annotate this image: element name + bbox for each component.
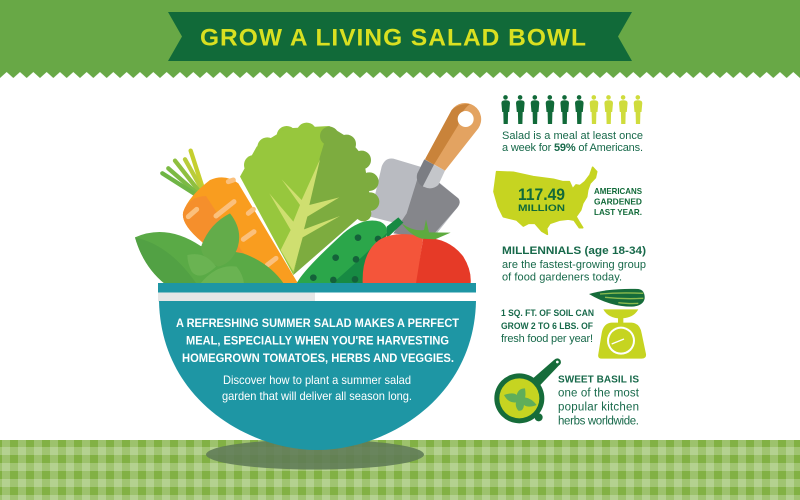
- stat text: americans gardened: GARDENED: [594, 196, 642, 206]
- stat text: millennials: are the fastest-growing group: [502, 259, 646, 271]
- stat text: salad: [502, 130, 643, 154]
- lettuce rib: [269, 159, 340, 272]
- bowl inner strip: [158, 292, 315, 302]
- bowl body text: garden that will deliver all season long.: [222, 389, 412, 403]
- stat text: americans gardened: AMERICANS: [594, 186, 642, 196]
- bowl body text: [222, 373, 412, 403]
- stat text: basil: [558, 374, 640, 428]
- stat text: basil: herbs worldwide.: [558, 416, 639, 428]
- bowl heading: A REFRESHING SUMMER SALAD MAKES A PERFECT: [176, 316, 460, 330]
- stat text: americans gardened: LAST YEAR.: [594, 207, 642, 217]
- icon: basil: [135, 213, 284, 284]
- title: GROW A LIVING SALAD BOWL: [200, 24, 586, 52]
- bowl heading: HOMEGROWN TOMATOES, HERBS AND VEGGIES.: [182, 351, 454, 365]
- stat text: soil: [501, 308, 594, 345]
- scale: [598, 309, 646, 359]
- icon: USA map: [494, 167, 597, 234]
- stat text: basil: one of the most: [558, 388, 640, 400]
- basil leaf: [504, 388, 537, 411]
- stat text: soil: GROW 2 TO 6 LBS. OF: [501, 321, 593, 332]
- bowl shadow: [206, 440, 424, 470]
- stat: 117.49 million: [518, 186, 565, 214]
- tablecloth: [0, 440, 800, 500]
- stat: 117.49 million: 117.49: [518, 186, 565, 204]
- stat text: basil: SWEET BASIL IS: [558, 374, 639, 386]
- icon: zucchini on scale: [589, 289, 646, 359]
- bowl body: [159, 301, 476, 450]
- stat: 117.49 million: MILLION: [518, 203, 565, 214]
- stat text: basil: popular kitchen: [558, 402, 639, 414]
- icon: trowel: [370, 103, 481, 238]
- zucchini: [589, 289, 645, 307]
- stat text: soil: fresh food per year!: [501, 333, 593, 345]
- icon: lettuce: [240, 123, 379, 275]
- stat: people pictogram: [501, 95, 642, 124]
- bowl body text: Discover how to plant a summer salad: [223, 373, 411, 387]
- stat text: millennials: MILLENNIALS (age 18-34): [502, 245, 646, 257]
- header band: [0, 0, 800, 78]
- icon: cucumber: [297, 217, 403, 284]
- stat text: salad: Salad is a meal at least once: [502, 130, 643, 142]
- title banner: [168, 12, 632, 61]
- bowl heading: [176, 316, 460, 365]
- stat text: millennials: of food gardeners today.: [502, 272, 622, 284]
- stat text: soil: 1 SQ. FT. OF SOIL CAN: [501, 308, 594, 319]
- stat text: americans gardened: [594, 186, 642, 217]
- salad vegetables: [135, 103, 481, 284]
- stat text: millennials: [502, 245, 646, 284]
- icon: skillet with basil: [494, 358, 561, 423]
- icon: tomato: [363, 219, 471, 283]
- icon: carrot: [162, 151, 298, 284]
- bowl: [158, 283, 476, 450]
- bowl heading: MEAL, ESPECIALLY WHEN YOU'RE HARVESTING: [186, 334, 449, 348]
- stat text: salad: a week for 59% of Americans.: [502, 142, 643, 154]
- bowl rim: [158, 283, 476, 292]
